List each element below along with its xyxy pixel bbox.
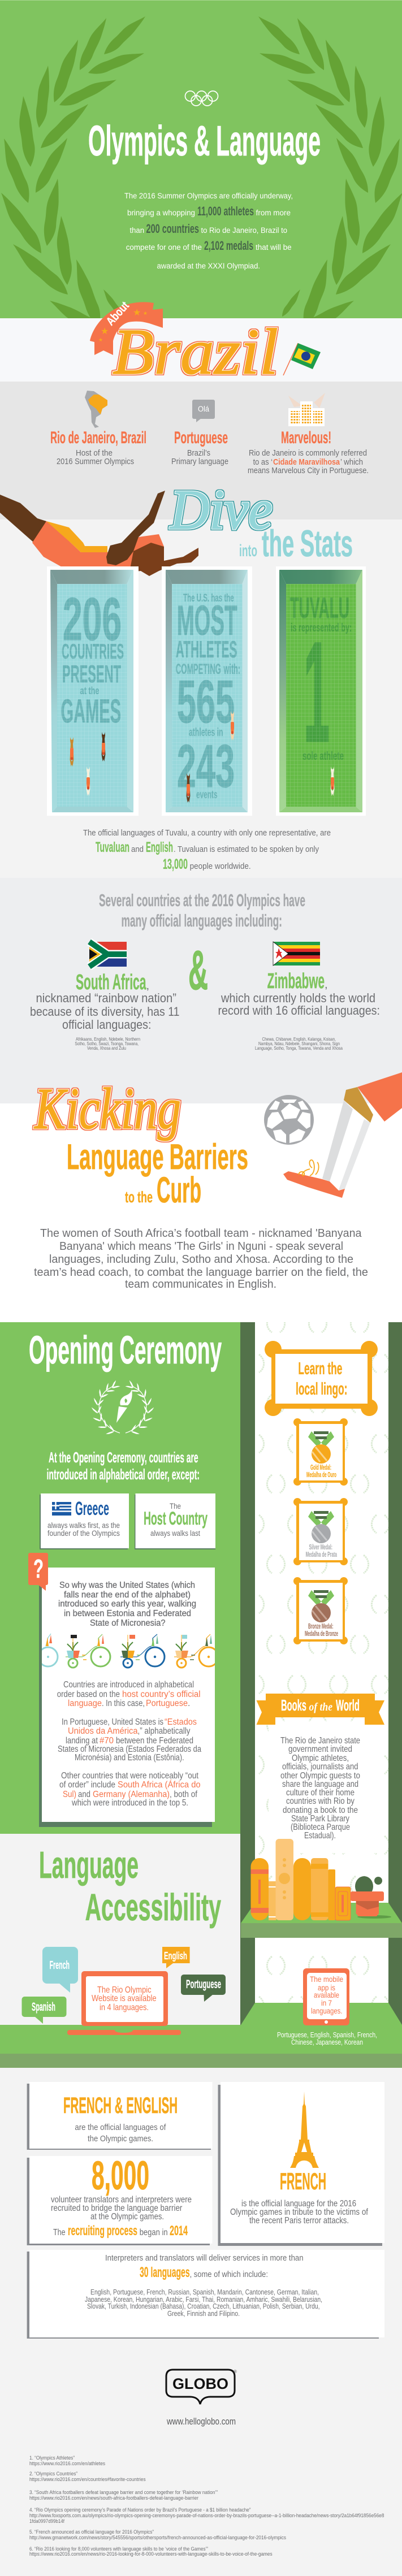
card: 8,000 volunteers: The: [53, 2228, 66, 2237]
text: Tuvalu languages: English: [146, 839, 173, 855]
panel: 206 countries: at the: [80, 685, 100, 696]
fact: Rio de Janeiro: Host of the: [76, 448, 113, 458]
block: South Africa: ,: [146, 980, 149, 992]
text: host country explanation: which were introduced in the top 5.: [71, 1798, 188, 1808]
block: Zimbabwe: which currently holds the world: [221, 991, 375, 1005]
card: 8,000 volunteers: volunteer translators and interpreters were: [51, 2195, 192, 2205]
block: Zimbabwe: Zimbabwe: [267, 969, 325, 993]
block: South Africa: Sotho, Sotho, Swazi, Tsonga, Tswana,: [75, 1041, 139, 1046]
logo: GLOBO: GLOBO: [172, 2375, 228, 2392]
card: silver medal: [293, 1498, 348, 1565]
text: book donation: donating a book to the: [283, 1806, 358, 1815]
icon: olympic rings: [185, 91, 218, 106]
text: South Africa football team: team communicates in English.: [125, 1278, 276, 1291]
panel: most athletes: 243: [177, 732, 235, 800]
card: French official language: is the official language for the 2016: [241, 2199, 356, 2209]
illustration: tablet: available: [314, 1991, 339, 1999]
icon: city buildings: [288, 393, 325, 426]
text: book donation: countries with Rio by: [286, 1796, 355, 1806]
heading: Opening Ceremony: Opening Ceremony: [29, 1328, 222, 1372]
text: host country explanation: Unidos da América: [68, 1726, 138, 1736]
block: South Africa: [30, 971, 180, 1051]
text: host country explanation: Countries are introduced in alphabetical: [63, 1680, 194, 1690]
card: gold medal: [293, 1418, 348, 1486]
references: 1. “Olympics Athletes”: [29, 2455, 75, 2461]
panel: Tuvalu: is represented by:: [291, 622, 352, 634]
text: book donation: Olympic athletes,: [292, 1754, 349, 1763]
panel: most athletes: events: [196, 789, 218, 801]
text: South Africa football team: languages, including Zulu, Sotho and Xhosa. According to the: [49, 1253, 353, 1266]
text: question: [58, 1581, 196, 1628]
ribbon: books of the world: Books: [281, 1696, 306, 1714]
sign: learn the local lingo: [265, 1341, 378, 1416]
ribbon: books of the world: of the: [309, 1701, 332, 1713]
card: 30 languages: Greek, Finnish and Filipino.: [167, 2309, 240, 2318]
text: host country explanation: between the Federated: [116, 1736, 193, 1746]
icon: South Africa flag: [89, 942, 127, 967]
block: Zimbabwe: record with 16 official languages:: [218, 1003, 380, 1018]
text: South Africa football team: [34, 1227, 368, 1291]
block: Zimbabwe: ,: [325, 979, 328, 991]
text: host country explanation: language: [68, 1699, 102, 1708]
fact: Portuguese: Portuguese: [174, 428, 228, 447]
text: opening ceremony intro: At the Opening Ceremony, countries are: [49, 1449, 198, 1466]
fact: Rio de Janeiro: [50, 428, 146, 466]
panel: most athletes: athletes in: [189, 726, 223, 739]
intro paragraph: from more: [256, 209, 291, 217]
speech bubble: Spanish: [21, 1997, 67, 2024]
heading: Dive into the Stats: [169, 478, 353, 564]
speech bubble: English: English: [164, 1950, 187, 1962]
icon: speech bubble Olá: [192, 400, 215, 422]
text: book donation: The Rio de Janeiro state: [280, 1736, 360, 1746]
references: http://www.gmanetwork.com/news/story/545556/sports/othersports/french-announced-as-official-language-for-2016-olympics: [29, 2535, 286, 2541]
text: Tuvalu languages: Tuvaluan: [96, 839, 129, 855]
infographic canvas: &: [188, 939, 208, 1001]
fact: Marvelous: ’ which: [340, 457, 363, 467]
card: 30 languages: Japanese, Korean, Hungarian, Arabic, Farsi, Thai, Romanian, Amharic, Swahili, Belarusian,: [85, 2295, 322, 2304]
illustration: laptop: Website is available: [92, 1994, 157, 2003]
icon: speech bubble Olá: Olá: [198, 405, 209, 413]
icon: question bubble: [28, 1553, 48, 1591]
intro paragraph: compete for one of the: [126, 243, 202, 252]
logo: GLOBO: ®: [234, 2369, 237, 2374]
illustration: tablet: The mobile: [310, 1975, 343, 1984]
references: https://www.rio2016.com/en/athletes: [29, 2461, 105, 2467]
heading: Kicking Language Barriers to the Curb: Kicking: [33, 1076, 181, 1141]
fact: Rio de Janeiro: Rio de Janeiro, Brazil: [50, 428, 146, 447]
card: 30 languages: , some of which include:: [190, 2270, 268, 2279]
panel: 206 countries: COUNTRIES: [62, 640, 124, 663]
card: Greece: [40, 1493, 129, 1549]
icon: Eiffel Tower: [290, 2092, 319, 2168]
references: [29, 2455, 384, 2557]
heading: Kicking Language Barriers to the Curb: to the: [125, 1188, 153, 1206]
icon: swimmer: [331, 767, 334, 796]
illustration: laptop: in 4 languages.: [100, 2003, 149, 2012]
text: host country explanation: Germany (Alemanha): [93, 1790, 170, 1799]
text: host country explanation: Micronésia) and Estonia (Estônia).: [75, 1753, 184, 1763]
text: host country explanation: “Estados: [165, 1717, 197, 1727]
card: French and English: are the official languages of: [75, 2123, 166, 2132]
text: host country explanation: In Portuguese, United States is: [62, 1717, 163, 1727]
text: question: introduced so early this year, walking: [58, 1599, 196, 1609]
text: question: So why was the United States (which: [59, 1581, 195, 1590]
block: South Africa: because of its diversity, has 11: [30, 1005, 180, 1019]
fact: Marvelous: to as ‘: [253, 457, 273, 467]
intro paragraph: bringing a whopping: [127, 209, 195, 217]
ribbon: about: ★: [133, 308, 141, 318]
text: mobile app languages: [277, 2031, 377, 2046]
text: South Africa football team: The women of South Africa’s football team - nicknamed 'Banyana: [40, 1227, 362, 1240]
card: Host Country: Host Country: [144, 1508, 208, 1529]
heading: Kicking Language Barriers to the Curb: Language Barriers: [67, 1137, 248, 1177]
references: 1fda0997d99b14f: [29, 2518, 64, 2525]
sign: learn the local lingo: Learn the: [298, 1358, 342, 1378]
text: book donation: State Park Library: [291, 1814, 349, 1824]
ribbon: about: ★: [101, 327, 109, 336]
panel: 206 countries: [47, 566, 139, 816]
icon: swimmers: [70, 732, 105, 796]
speech bubble: French: French: [50, 1959, 70, 1972]
text: host country explanation: ,” alphabetically: [138, 1726, 191, 1736]
text: book donation: officials, journalists and: [282, 1762, 358, 1772]
block: South Africa: Venda, Xhosa and Zulu: [87, 1045, 126, 1051]
card: 8,000 volunteers: began in: [140, 2228, 168, 2237]
text: host country explanation: Portuguese: [146, 1699, 188, 1708]
card: 30 languages: 30 languages: [140, 2265, 190, 2280]
references: https://www.rio2016.com/en/news/rio-2016-looking-for-8-000-volunteers-with-language-skills-to-be-voice-of-the-games: [29, 2551, 273, 2557]
heading: Kicking Language Barriers to the Curb: Curb: [157, 1170, 201, 1210]
text: Tuvalu languages: people worldwide.: [190, 861, 251, 871]
panel: most athletes: COMPETING: [176, 661, 221, 677]
illustration: flower bicycles: [38, 1634, 218, 1668]
speech bubble: Portuguese: Portuguese: [186, 1978, 221, 1991]
text: book donation: [280, 1736, 360, 1841]
text: host country explanation: [57, 1680, 201, 1808]
card: 8,000 volunteers: 8,000: [92, 2154, 149, 2198]
panel: learn the local lingo: [265, 1341, 378, 1644]
text: Tuvalu languages: 13,000: [163, 856, 188, 872]
text: South Africa football team: Banyana' which means 'The Girls' in Nguni - speak several: [59, 1240, 343, 1253]
speech bubble: Spanish: Spanish: [32, 2001, 55, 2014]
intro paragraph: to Rio de Janeiro, Brazil to: [201, 226, 287, 235]
fact: Portuguese: [171, 428, 228, 466]
text: book donation: Estadual).: [304, 1831, 336, 1841]
text: book donation: share the language and: [282, 1780, 358, 1789]
illustration: diver: [0, 491, 198, 581]
text: host country explanation: landing at: [66, 1736, 98, 1746]
block: South Africa: official languages:: [62, 1018, 152, 1032]
ribbon: about: ★: [143, 310, 148, 316]
floor and shelf: [0, 2003, 402, 2068]
card: 30 languages: English, Portuguese, French, Russian, Spanish, Mandarin, Cantonese, German, Italian,: [90, 2288, 319, 2296]
ribbon: about: [90, 299, 163, 355]
card: bronze medal: [293, 1577, 348, 1644]
fact: Portuguese: Primary language: [171, 457, 228, 466]
fact: Marvelous: Cidade Maravilhosa: [273, 457, 340, 467]
card: 8,000 volunteers: [27, 2154, 212, 2245]
ribbon: about: About: [104, 299, 132, 328]
card: French official language: the recent Paris terror attacks.: [249, 2216, 349, 2226]
card: gold medal: Gold Medal:: [310, 1464, 331, 1471]
card: Host Country: The: [170, 1501, 181, 1510]
text: question: in between Estonia and Federated: [64, 1609, 191, 1618]
text: Tuvalu languages: The official languages of Tuvalu, a country with only one representative, are: [83, 828, 331, 838]
illustration: soccer ball: [264, 1095, 314, 1145]
heading: Language Accessibility: Accessibility: [85, 1886, 221, 1929]
heading: Language Accessibility: Language: [39, 1844, 139, 1886]
heading: several countries: many official languages including:: [121, 911, 282, 930]
panel: most athletes: with:: [223, 661, 240, 677]
card: bronze medal: Medalha de Bronze: [305, 1630, 338, 1638]
text: mobile app languages: Portuguese, English, Spanish, French,: [277, 2031, 377, 2039]
card: 30 languages: Interpreters and translators will deliver services in more than: [105, 2253, 303, 2263]
references: https://www.rio2016.com/en/news/south-africa-footballers-defeat-language-barrier: [29, 2495, 198, 2501]
block: South Africa: Afrikaans, English, Ndebele, Northern: [76, 1036, 140, 1042]
card: 8,000 volunteers: recruiting process: [68, 2223, 137, 2239]
block: Zimbabwe: Chewa, Chibarwe, English, Kalanga, Koisan,: [262, 1036, 336, 1042]
illustration: tablet: languages.: [311, 2007, 343, 2015]
panel: most athletes: MOST: [177, 597, 237, 644]
icon: South America map: [85, 391, 107, 428]
heading: Language Accessibility: [39, 1844, 221, 1929]
intro paragraph: that will be: [256, 243, 292, 252]
text: host country explanation: and: [78, 1790, 90, 1799]
intro paragraph: The 2016 Summer Olympics are officially underway,: [124, 192, 293, 200]
block: Zimbabwe: [218, 969, 380, 1051]
card: French and English: the Olympic games.: [88, 2134, 153, 2144]
text: book donation: government invited: [288, 1744, 352, 1754]
panel: Tuvalu: sole athlete: [302, 750, 344, 763]
text: host country explanation: of order” include: [59, 1780, 115, 1790]
intro paragraph: than: [130, 226, 144, 235]
card: French official language: Olympic games in tribute to the victims of: [230, 2207, 369, 2217]
panel: Tuvalu: 1: [304, 613, 330, 772]
heading: Kicking Language Barriers to the Curb: [33, 1076, 248, 1210]
illustration: kicking leg: [283, 1072, 402, 1198]
illustration: tablet: in 7: [321, 1999, 332, 2007]
website url: www.helloglobo.com: [166, 2416, 236, 2427]
card: French official language: FRENCH: [280, 2168, 326, 2194]
speech bubble: Portuguese: [181, 1975, 226, 2002]
icon: Greek flag: [52, 1502, 71, 1516]
text: Tuvalu languages: and: [131, 845, 144, 854]
ribbon: books of the world: World: [336, 1696, 360, 1714]
text: Tuvalu languages: [83, 828, 331, 872]
icon: question bubble: ?: [33, 1554, 44, 1583]
speech bubble: English: [162, 1947, 190, 1968]
illustration: laptop: [67, 1971, 181, 2035]
card: silver medal: Silver Medal:: [309, 1543, 332, 1551]
text: book donation: culture of their home: [286, 1788, 355, 1798]
references: 3. “South Africa footballers defeat language barrier and come together for ‘Rainbow nation’”: [29, 2490, 218, 2496]
card: 8,000 volunteers: 2014: [170, 2223, 188, 2239]
fact: Rio de Janeiro: 2016 Summer Olympics: [57, 457, 134, 466]
card: gold medal: Medalha de Ouro: [306, 1471, 336, 1479]
card: 8,000 volunteers: at the Olympic games.: [90, 2212, 164, 2222]
block: South Africa: nicknamed “rainbow nation”: [36, 991, 176, 1005]
panel: 206 countries: 206: [63, 585, 122, 653]
heading: Brazil: Brazil: [113, 316, 278, 388]
illustration: tablet: app is: [318, 1984, 335, 1992]
text: host country explanation: order based on the: [57, 1690, 120, 1699]
panel: most athletes: 565: [177, 668, 235, 735]
ribbon: about: ★: [98, 337, 103, 343]
fact: Marvelous: [248, 428, 369, 475]
references: 2. “Olympics Countries”: [29, 2471, 77, 2477]
illustration: laptop: The Rio Olympic: [97, 1985, 152, 1995]
ribbon: books of the world: [257, 1694, 384, 1725]
logo: GLOBO: [166, 2369, 237, 2404]
text: host country explanation: Other countries that were noticeably “out: [61, 1771, 199, 1781]
panel: 206 countries: GAMES: [61, 693, 121, 730]
intro paragraph: awarded at the XXXI Olympiad.: [157, 262, 260, 270]
text: book donation: other Olympic guests to: [280, 1771, 360, 1781]
block: Zimbabwe: Nambya, Ndau, Ndebele, Shangani, Shona, Sign: [258, 1041, 340, 1046]
text: host country explanation: #70: [100, 1736, 114, 1746]
text: host country explanation: host country’s official: [122, 1690, 201, 1699]
references: 4. “Rio Olympics opening ceremony’s Parade of Nations order by Brazil’s Portuguese - a $1 billion headache”: [29, 2507, 251, 2513]
panel: why the United States: [28, 1553, 218, 1827]
fact: Marvelous: Marvelous!: [281, 428, 331, 447]
text: book donation: (Biblioteca Parque: [291, 1822, 350, 1832]
references: https://www.rio2016.com/en/countries#favorite-countries: [29, 2477, 146, 2483]
heading: several countries: [99, 890, 305, 930]
card: French official language: [218, 2082, 384, 2246]
sign: learn the local lingo: local lingo:: [296, 1379, 347, 1399]
panel: most athletes: The U.S. has the: [183, 592, 234, 604]
panel: most athletes: ATHLETES: [176, 636, 237, 663]
panel: 206 countries: PRESENT: [62, 660, 121, 688]
icon: swimmers: [187, 711, 234, 803]
text: Tuvalu languages: . Tuvaluan is estimated to be spoken by only: [174, 845, 319, 854]
icon: Brazil flag: [283, 343, 321, 375]
card: Greece: always walks first, as the: [47, 1521, 120, 1530]
fact: Marvelous: means Marvelous City in Portuguese.: [248, 466, 369, 475]
panel: most athletes: [162, 566, 252, 816]
card: French and English: FRENCH & ENGLISH: [63, 2093, 178, 2118]
references: 6. “Rio 2016 looking for 8,000 volunteers with language skills to be ‘voice of the Games’”: [29, 2546, 208, 2552]
card: silver medal: Medalha de Prata: [306, 1551, 338, 1558]
intro paragraph: 200 countries: [146, 222, 199, 236]
intro paragraph: 2,102 medals: [204, 239, 253, 253]
text: opening ceremony intro: introduced in alphabetical order, except:: [46, 1466, 200, 1483]
panel: Brazil facts: [50, 391, 369, 475]
text: host country explanation: States of Micronesia (Estados Federados da: [58, 1744, 201, 1754]
card: 30 languages: Slovak, Turkish, Indonesian (Bahasa), Croatian, Czech, Lithuanian, Polish, Serbian, Urdu,: [87, 2302, 320, 2310]
text: host country explanation: .: [188, 1699, 190, 1708]
block: South Africa: South Africa: [76, 971, 146, 994]
illustration: tablet: [303, 1968, 349, 2025]
text: opening ceremony intro: [46, 1449, 200, 1483]
text: question: State of Micronesia?: [90, 1618, 166, 1628]
icon: Zimbabwe flag: [273, 942, 320, 966]
card: 30 languages: [27, 2250, 384, 2339]
panel: books of the world: [257, 1694, 384, 1853]
text: host country explanation: South Africa (África do: [118, 1780, 201, 1790]
fact: Marvelous: Rio de Janeiro is commonly referred: [249, 448, 367, 458]
references: 5. “French announced as official language for 2016 Olympics”: [29, 2529, 154, 2535]
laurel wreath decoration: [0, 12, 402, 339]
card: Host Country: [135, 1493, 215, 1549]
icon: torch in laurel wreath: [91, 1380, 154, 1435]
card: Host Country: always walks last: [150, 1529, 200, 1538]
card: French and English: [27, 2082, 212, 2150]
card: Greece: Greece: [75, 1498, 109, 1519]
heading: Dive into the Stats: into: [239, 542, 257, 560]
intro paragraph: [124, 192, 293, 270]
text: question: falls near the end of the alphabet): [64, 1590, 191, 1600]
block: Zimbabwe: Language, Sotho, Tonga, Tswana, Venda and Xhosa: [255, 1045, 343, 1051]
text: South Africa football team: team’s head coach, to combat the language barrier on the field, the: [34, 1266, 368, 1279]
card: Greece: founder of the Olympics: [47, 1529, 120, 1538]
text: mobile app languages: Chinese, Japanese, Korean: [291, 2038, 363, 2046]
text: host country explanation: Sul): [63, 1790, 76, 1799]
speech bubble: French: [42, 1947, 78, 1993]
panel: Tuvalu: [276, 566, 366, 816]
fact: Portuguese: Brazil’s: [187, 448, 210, 458]
text: host country explanation: , both of: [170, 1790, 198, 1799]
text: host country explanation: . In this case,: [102, 1699, 145, 1708]
card: bronze medal: Bronze Medal:: [308, 1622, 334, 1630]
illustration: bookshelf with books and cactus: [241, 1839, 402, 1938]
intro paragraph: 11,000 athletes: [197, 204, 254, 218]
heading: Dive into the Stats: Dive: [169, 478, 273, 541]
card: 8,000 volunteers: recruited to bridge the language barrier: [51, 2203, 182, 2213]
